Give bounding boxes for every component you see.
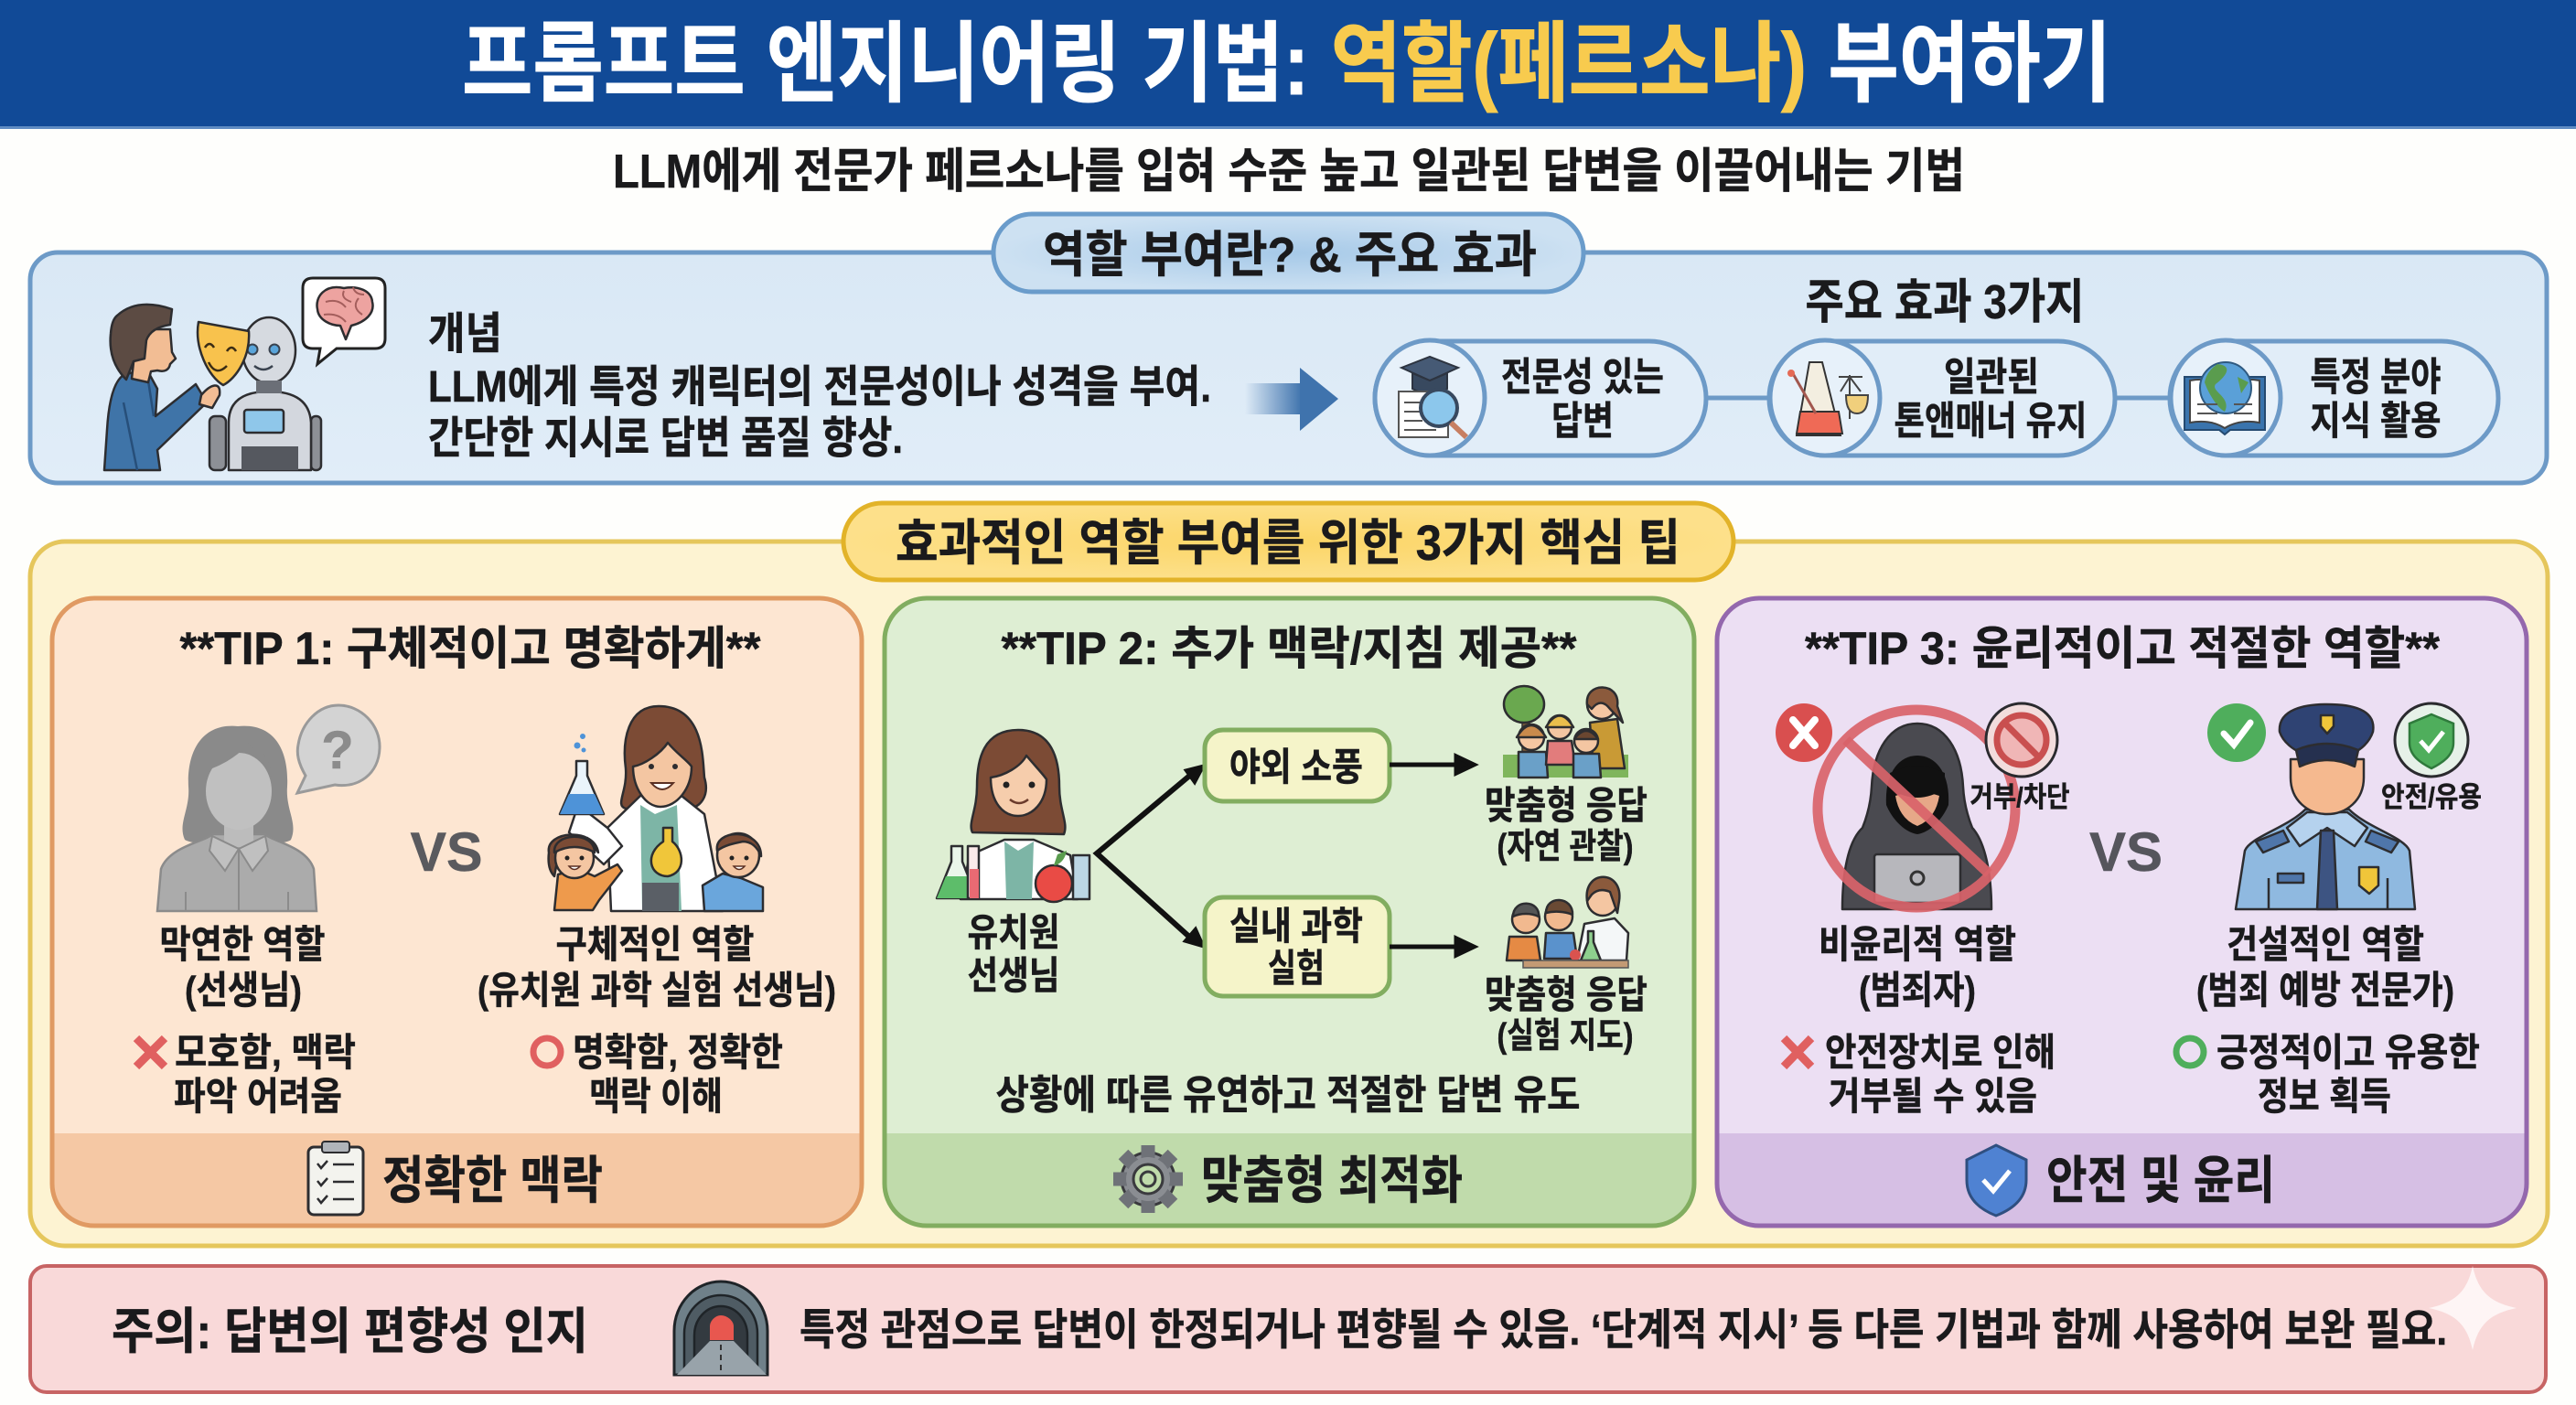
tips heading pill: 효과적인 역할 부여를 위한 3가지 핵심 팁 [896,516,1680,571]
effect 3: domain knowledge: 지식 활용 [2311,400,2441,444]
icon: globe and book [2184,362,2265,434]
pro text: 정보 획득 [2258,1075,2391,1118]
tip card 3 [1717,598,2527,1226]
icon: person, mask and robot [104,278,385,470]
icon: red cross [1784,1038,1811,1067]
con text [1825,1031,2055,1118]
pro text: 명확함, 정확한 [573,1031,783,1074]
icon: gear [1113,1145,1183,1213]
panel heading pill: 역할 부여란? & 주요 효과 [1043,228,1537,283]
tip 3 heading: **TIP 3: 윤리적이고 적절한 역할** [1805,623,2441,674]
scenario: outdoor picnic: 야외 소풍 [1229,745,1363,788]
unethical role label: 비윤리적 역할 [1819,923,2016,966]
icon: specific teacher with children [549,706,763,911]
arrow: picnic to response [1390,756,1474,773]
unethical role label [1819,923,2016,1012]
safe label: 안전/유용 [2381,781,2482,813]
constructive role label: (범죄 예방 전문가) [2196,969,2454,1012]
panel: caution [30,1266,2546,1392]
effect text: 일관된 [1944,356,2039,400]
icon: refuse / block badge [1970,703,2069,813]
panel: what is role assignment [30,214,2547,483]
tip 2 heading: **TIP 2: 추가 맥락/지침 제공** [1001,623,1577,674]
icon: clipboard [308,1142,363,1215]
takeaway: accurate context: 정확한 맥락 [382,1152,603,1209]
icon: sparkle watermark [2429,1266,2517,1350]
icon: red circle [533,1038,561,1066]
tip 2 summary: 상황에 따른 유연하고 적절한 답변 유도 [995,1073,1581,1118]
pro text: 긍정적이고 유용한 [2216,1031,2480,1074]
effect 3: domain knowledge [2170,340,2498,456]
icon: safe / useful badge [2381,703,2482,813]
pro text [2216,1031,2480,1118]
icon: hacker with prohibition sign [1776,703,2015,909]
takeaway: tailored optimization: 맞춤형 최적화 [1201,1152,1463,1209]
icon: vague teacher silhouette [157,705,380,911]
scenario: indoor science: 실내 과학 [1229,905,1363,948]
arrow: concept to effects [1245,368,1338,431]
tips heading pill [843,503,1733,580]
vague role label: (선생님) [185,969,302,1012]
effect 1: expert answers: 답변 [1551,400,1614,444]
concept text [428,310,1211,463]
specific role label: (유치원 과학 실험 선생님) [478,969,836,1012]
connector lines [1707,395,2171,401]
panel: three key tips [30,503,2548,1246]
effect 2: consistent tone [1769,340,2115,456]
response label 1 [1485,784,1648,866]
icon: science lab scene [1507,877,1628,968]
icon: red cross [136,1038,165,1067]
icon: police officer [2236,704,2415,909]
icon: picnic scene [1503,686,1628,778]
refuse label: 거부/차단 [1970,781,2069,813]
scenario: indoor science [1205,897,1390,996]
pro text: 맥락 이해 [589,1075,723,1118]
con text: 파악 어려움 [174,1075,342,1118]
icon: green check badge [2207,703,2266,762]
icon: green circle [2176,1038,2204,1066]
icon: kindergarten teacher [937,730,1089,902]
vs label: VS [410,821,483,883]
panel heading pill [993,214,1583,292]
concept text: LLM에게 특정 캐릭터의 전문성이나 성격을 부여. [428,363,1211,412]
subtitle: LLM에게 전문가 페르소나를 입혀 수준 높고 일관된 답변을 이끌어내는 기법 [613,145,1965,198]
icon: tunnel [674,1282,767,1375]
header banner [0,0,2576,129]
response label 2: (실험 지도) [1497,1017,1634,1056]
unethical role label: (범죄자) [1859,969,1976,1012]
effect 1: expert answers [1375,340,1706,456]
constructive role label: 건설적인 역할 [2227,923,2424,966]
response label 2 [1485,973,1648,1056]
effect text: 특정 분야 [2311,356,2441,400]
takeaway: safety and ethics: 안전 및 윤리 [2046,1152,2275,1209]
constructive role label [2196,923,2454,1012]
response label 2: 맞춤형 응답 [1485,973,1648,1016]
specific role label: 구체적인 역할 [556,923,754,966]
teacher label: 선생님 [968,954,1059,997]
effect text: 전문성 있는 [1501,356,1664,400]
response label 1: (자연 관찰) [1497,828,1634,866]
vs label: VS [2089,821,2163,883]
tip card 1 [52,598,862,1226]
tip 1 heading: **TIP 1: 구체적이고 명확하게** [179,623,761,674]
arrow: science to response [1390,938,1474,955]
scenario: indoor science: 실험 [1268,947,1325,990]
con text: 안전장치로 인해 [1825,1031,2055,1074]
icon: cap, document and magnifier [1399,357,1466,437]
effect 2: consistent tone: 톤앤매너 유지 [1894,400,2088,444]
con text [174,1031,356,1118]
scenario: outdoor picnic [1205,730,1390,801]
tip card 2 [885,598,1694,1226]
pro text [573,1031,783,1118]
teacher label: 유치원 [968,911,1059,954]
icon: metronome and scale [1787,362,1868,435]
response label 1: 맞춤형 응답 [1485,784,1648,827]
con text: 거부될 수 있음 [1829,1075,2037,1118]
concept text: 간단한 지시로 답변 품질 향상. [428,414,903,463]
specific role label [478,923,836,1012]
branching arrows [1097,766,1204,947]
concept text: 개념 [428,310,502,359]
caution heading: 주의: 답변의 편향성 인지 [112,1304,588,1359]
icon: vague teacher silhouette: ? [321,721,354,780]
icon: blue shield [1967,1145,2026,1216]
effects heading: 주요 효과 3가지 [1806,276,2084,329]
vague role label: 막연한 역할 [159,923,326,966]
con text: 모호함, 맥락 [175,1031,356,1074]
vague role label [159,923,326,1012]
teacher label [968,911,1059,997]
title: 프롬프트 엔지니어링 기법: 역할(페르소나) 부여하기 [462,16,2111,113]
